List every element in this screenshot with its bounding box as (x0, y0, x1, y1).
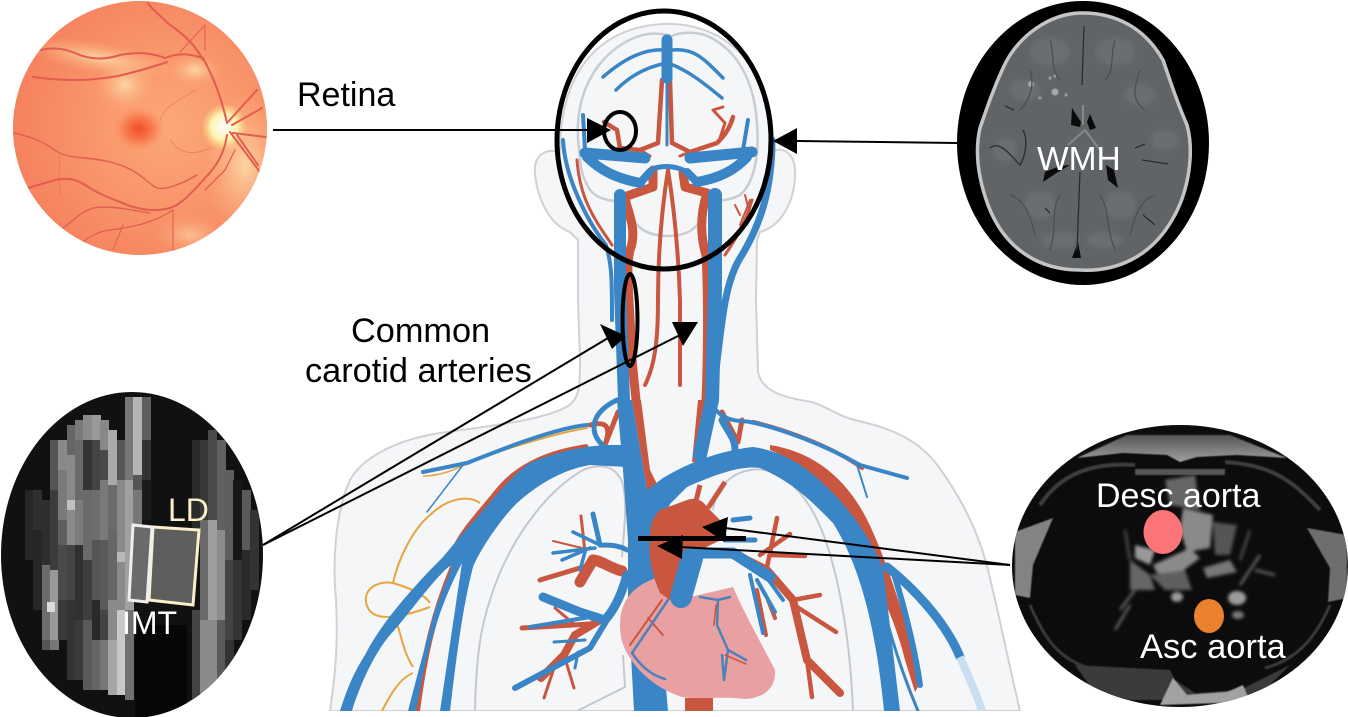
arrow: WMH (773, 128, 957, 154)
carotid region ellipse (622, 274, 638, 366)
fovea (118, 110, 162, 148)
label: Retina: Retina (297, 76, 395, 114)
pale retina patches (40, 41, 267, 248)
brain MRI (957, 1, 1209, 285)
dark band (135, 625, 187, 717)
coronary vessels (630, 597, 746, 680)
white matter hyperintensities (1028, 74, 1068, 100)
skull ring and brain tissue (977, 13, 1190, 270)
label: LD: LD (168, 492, 209, 528)
central artery taper (632, 400, 708, 490)
arch branches (695, 482, 725, 508)
label: Common carotid arteries: carotid arteries (305, 352, 532, 390)
right arch vein (647, 447, 900, 711)
arrows: carotid (263, 322, 698, 545)
chest wall (1015, 435, 1347, 705)
head region ellipse (557, 11, 771, 269)
label: Desc aorta: Desc aorta (1096, 477, 1260, 515)
left arch vein (340, 445, 627, 711)
lung outlines (475, 466, 853, 711)
retina fundus photo (13, 1, 287, 255)
body illustration (330, 24, 1020, 711)
LD outline (149, 527, 199, 605)
lumen box (149, 527, 199, 605)
lower arm artery right (884, 660, 889, 711)
sulci lines (990, 26, 1168, 250)
falx highlight (1068, 105, 1100, 150)
ventricles (1043, 108, 1118, 258)
veins (423, 40, 960, 711)
mediastinum (1115, 475, 1275, 630)
carotid ultrasound (1, 392, 263, 717)
aorta stub (685, 698, 713, 711)
intima box (130, 526, 150, 600)
brain outline (578, 33, 758, 236)
asc aorta marker (1194, 599, 1224, 633)
heart (620, 575, 775, 699)
arteries (467, 80, 862, 468)
subclavian artery right (770, 445, 922, 692)
aortic arch (649, 499, 727, 600)
lymphatic vessels (366, 462, 480, 711)
label: Common carotid arteries: Common (351, 312, 490, 350)
IMT outline (129, 525, 152, 602)
label: Asc aorta: Asc aorta (1140, 628, 1287, 666)
label: WMH: WMH (1037, 141, 1121, 178)
arrows: aorta (638, 517, 1010, 565)
arrow: retina (273, 118, 611, 143)
optic disc (202, 104, 246, 150)
body silhouette (330, 24, 1020, 711)
subclavian artery left (454, 444, 589, 544)
pulmonary arteries (522, 516, 840, 698)
ultrasound pixels (25, 397, 259, 700)
gyri texture (993, 38, 1179, 248)
desc aorta marker (1144, 510, 1182, 554)
faded lower vein (960, 657, 982, 711)
lower arm artery left (417, 567, 453, 711)
pulmonary trunk (681, 518, 783, 633)
central vein trunk (617, 400, 672, 711)
retinal vessels (13, 3, 266, 253)
aortic MRI (1012, 425, 1348, 707)
label: IMT: IMT (122, 605, 177, 641)
retina region ellipse (604, 112, 636, 150)
pulmonary veins (515, 514, 627, 688)
